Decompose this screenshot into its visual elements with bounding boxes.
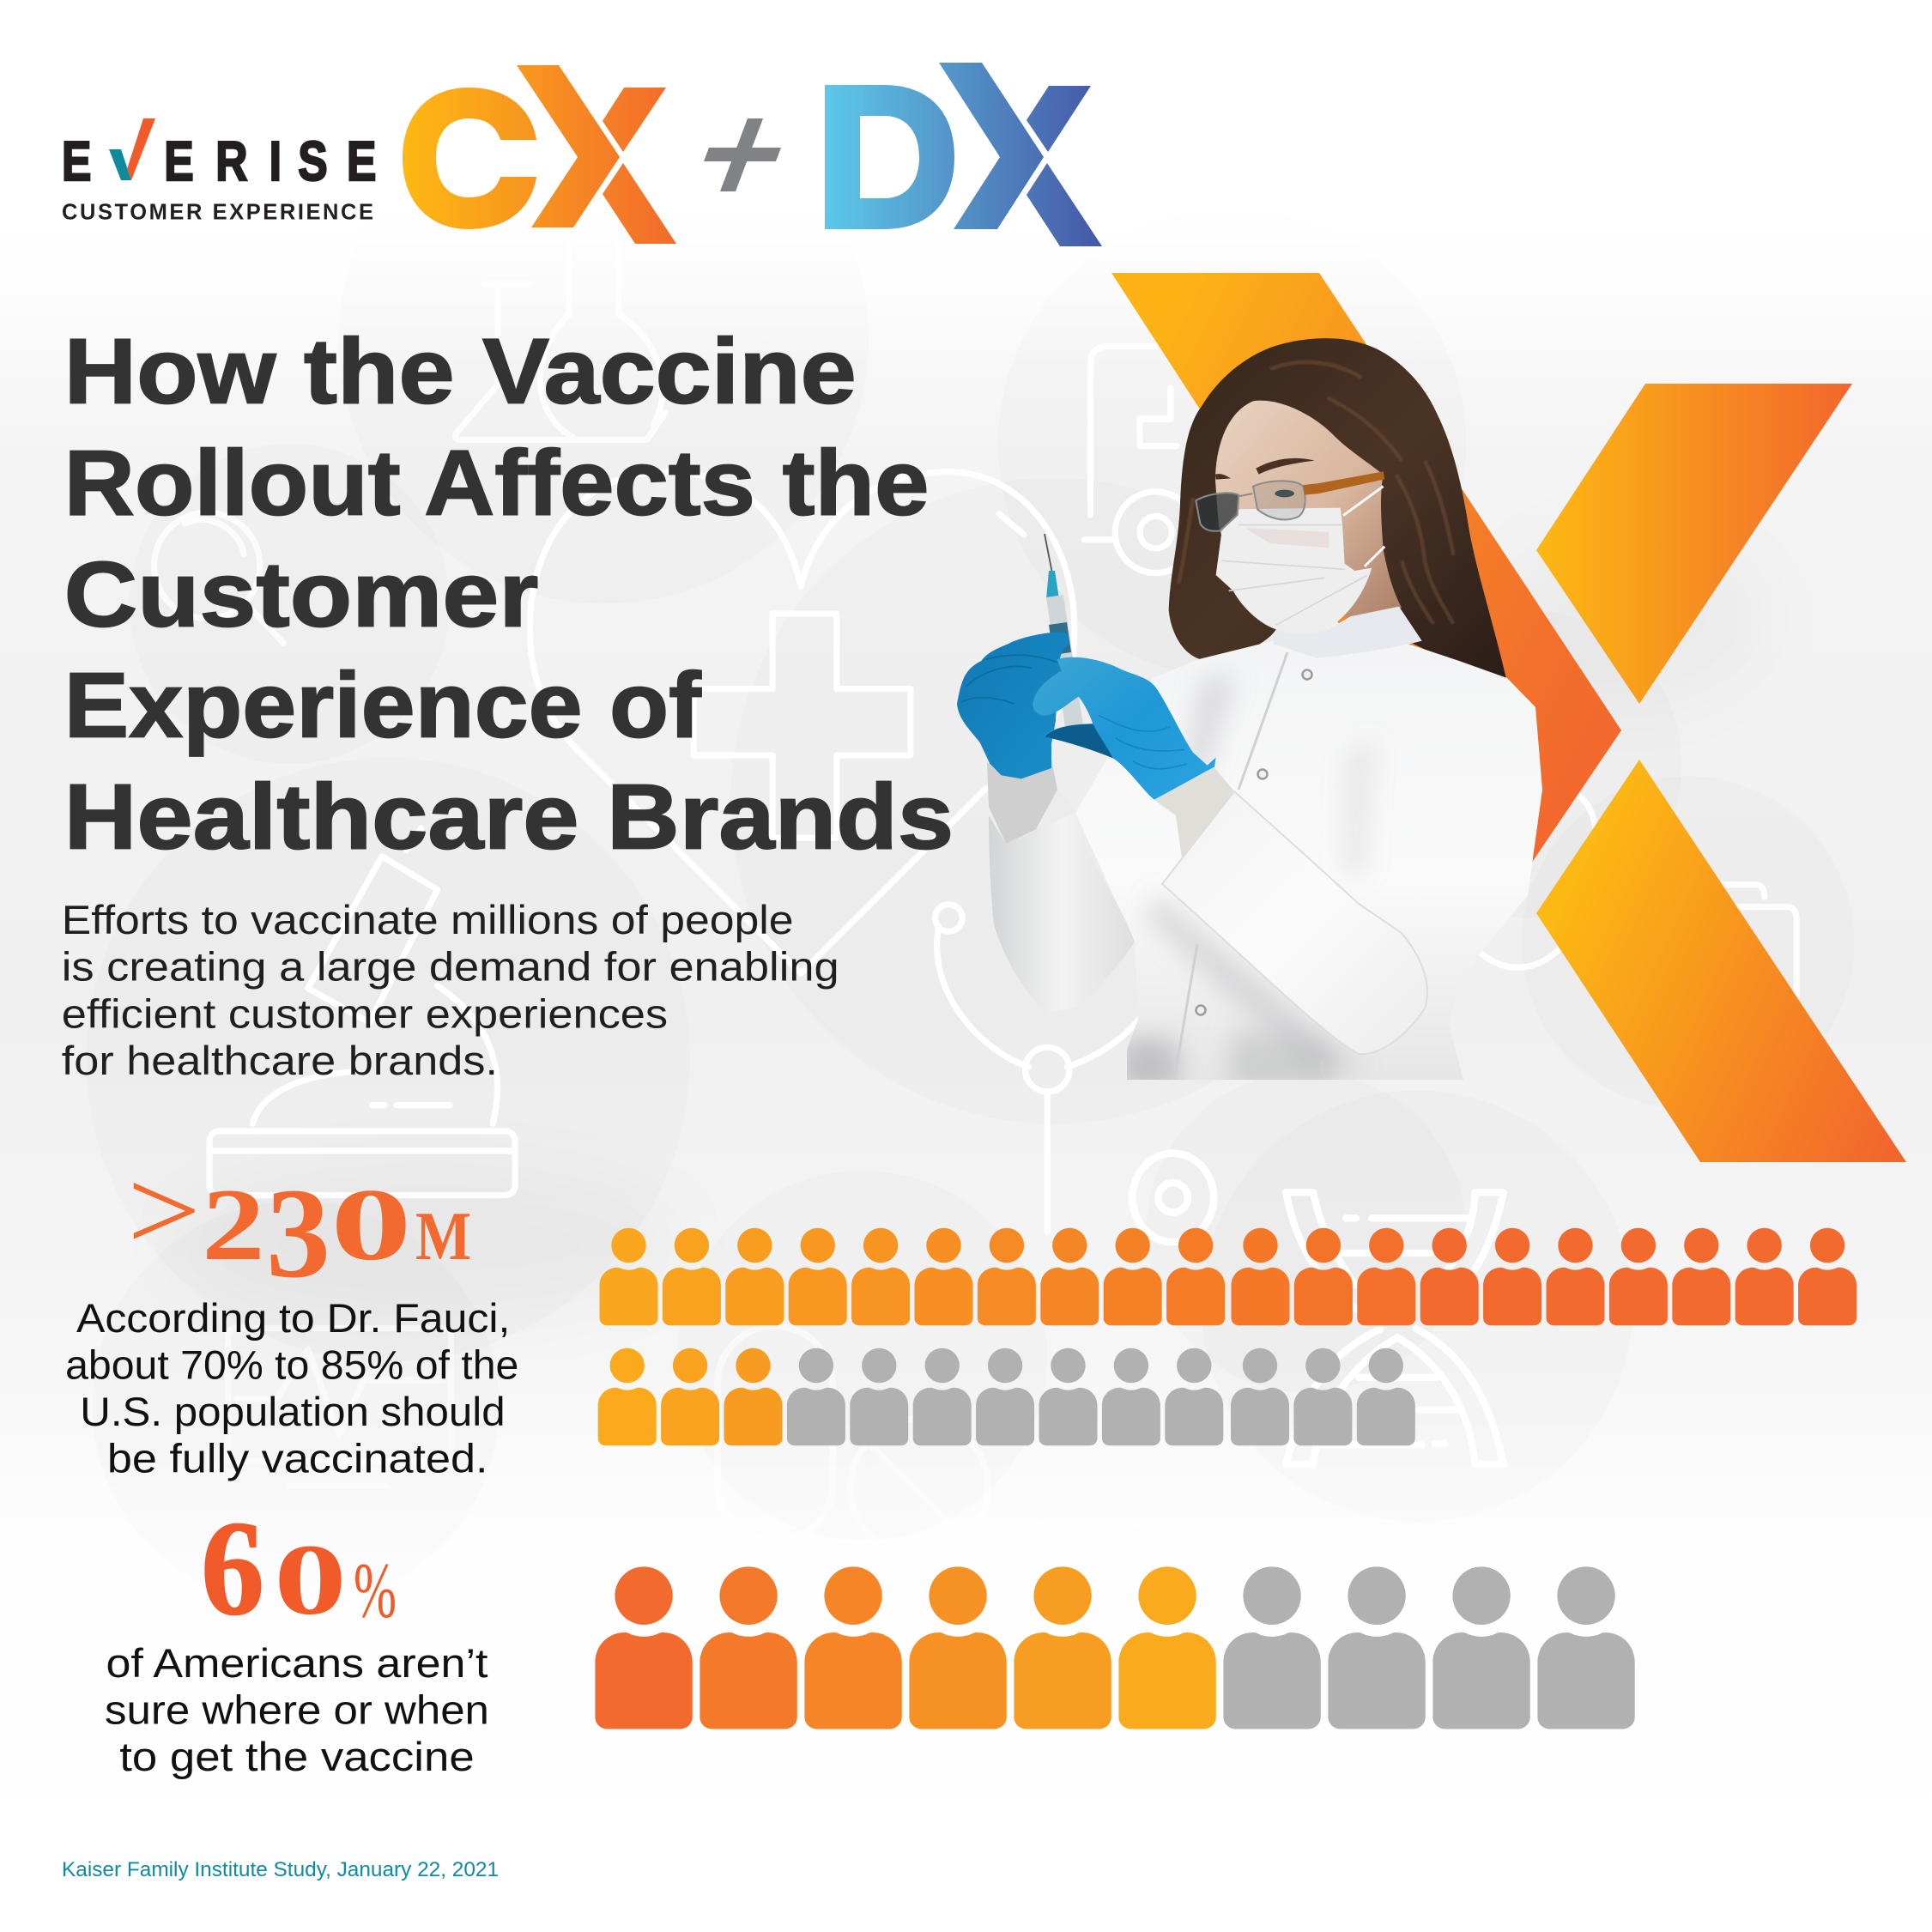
icon: DNA helix — [1286, 1192, 1504, 1464]
stat text: vaccination need: about 70% to 85% of the — [65, 1342, 518, 1388]
face and neck — [1215, 401, 1402, 618]
icon: heart outline — [530, 472, 1075, 973]
hair — [1169, 338, 1506, 679]
intro paragraph: efficient customer experiences — [62, 991, 668, 1037]
coat torso — [1075, 607, 1542, 1090]
icon: medical bag arcs — [1479, 789, 1596, 967]
intro paragraph: Efforts to vaccinate millions of people — [62, 898, 794, 943]
blue gloves — [957, 632, 1216, 800]
pictogram row: 3 orange and 10 grey people — [598, 1348, 1415, 1445]
title: How the Vaccine — [64, 319, 857, 422]
number 230: 3 — [266, 1162, 330, 1305]
plus sign — [704, 118, 781, 191]
stat text: vaccination need — [65, 1296, 518, 1482]
CX mark — [403, 65, 676, 244]
icon: folder — [1719, 885, 1796, 1008]
stat text: vaccination need: According to Dr. Fauci, — [76, 1296, 510, 1341]
syringe — [1045, 534, 1083, 727]
icon: ECG monitor — [228, 1329, 451, 1486]
intro paragraph: is creating a large demand for enabling — [62, 945, 839, 990]
stat text: vaccination need: U.S. population should — [80, 1390, 506, 1435]
number 230 — [202, 1162, 412, 1305]
title — [64, 319, 954, 869]
title: Healthcare Brands — [64, 766, 954, 869]
stat text: unsure where to get vaccine — [105, 1641, 489, 1780]
unit M: M — [415, 1199, 471, 1275]
icon: target dial — [1132, 1154, 1214, 1242]
icon: medicine bottle — [1024, 1521, 1148, 1641]
source footnote: Kaiser Family Institute Study, January 22, 2021 — [62, 1858, 499, 1881]
number 230: 0 — [330, 1168, 412, 1281]
surgical mask — [1216, 487, 1384, 633]
white fade at top of background — [0, 0, 1932, 369]
left glove — [957, 632, 1069, 778]
large X graphic — [1111, 273, 1906, 1162]
background haze — [172, 532, 1768, 1322]
stat: over 230 million — [127, 1147, 471, 1305]
intro paragraph — [62, 898, 839, 1084]
title: Experience of — [64, 653, 702, 756]
icon: ambulance — [1084, 346, 1214, 573]
X lower right arm — [1536, 760, 1906, 1162]
digit 6: 6 — [201, 1493, 264, 1644]
logo tagline: CUSTOMER EXPERIENCE — [62, 201, 373, 225]
logo wordmark EVERISE: E V ERISE — [62, 131, 376, 192]
right glove — [1033, 657, 1216, 800]
number 230: 2 — [202, 1168, 265, 1282]
glasses — [1196, 471, 1384, 531]
percent sign: % — [354, 1547, 397, 1634]
intro paragraph: for healthcare brands. — [62, 1039, 498, 1084]
pictogram row: 6 of 10 people — [595, 1566, 1635, 1729]
stat text: unsure where to get vaccine: to get the vaccine — [119, 1735, 475, 1780]
greater-than sign: > — [127, 1147, 201, 1275]
left sleeve — [987, 760, 1135, 1013]
DX mark — [825, 63, 1102, 246]
stat: 60 percent — [201, 1493, 397, 1644]
X upper right arm — [1536, 384, 1852, 704]
icon: magnifier — [154, 512, 283, 643]
icon: round tablet — [851, 1419, 988, 1556]
background circles — [86, 74, 1855, 1608]
icon: capsule — [718, 1326, 833, 1541]
logo: Everise Customer Experience — [62, 118, 376, 225]
icon: microscope — [209, 828, 515, 1196]
title: Rollout Affects the — [64, 431, 929, 534]
stat text: unsure where to get vaccine: of Americans aren’t — [106, 1641, 488, 1687]
coat buttons — [1196, 669, 1311, 1014]
illustration: woman in white coat holding a syringe — [957, 338, 1542, 1090]
X band behind the woman — [1111, 273, 1621, 866]
title: Customer — [64, 542, 538, 645]
white fade at bottom of background — [0, 1408, 1932, 1614]
right sleeve — [1154, 766, 1427, 1054]
icon: flask — [456, 244, 665, 440]
background medical line icons — [154, 244, 1796, 1641]
stat text: unsure where to get vaccine: sure where or when — [105, 1687, 489, 1733]
icon: medical cross — [693, 614, 911, 838]
icon: stethoscope — [936, 905, 1146, 1232]
stat text: vaccination need: be fully vaccinated. — [107, 1437, 488, 1482]
digit 0: 0 — [274, 1523, 347, 1636]
pictogram row: 20 orange people — [599, 1228, 1856, 1325]
